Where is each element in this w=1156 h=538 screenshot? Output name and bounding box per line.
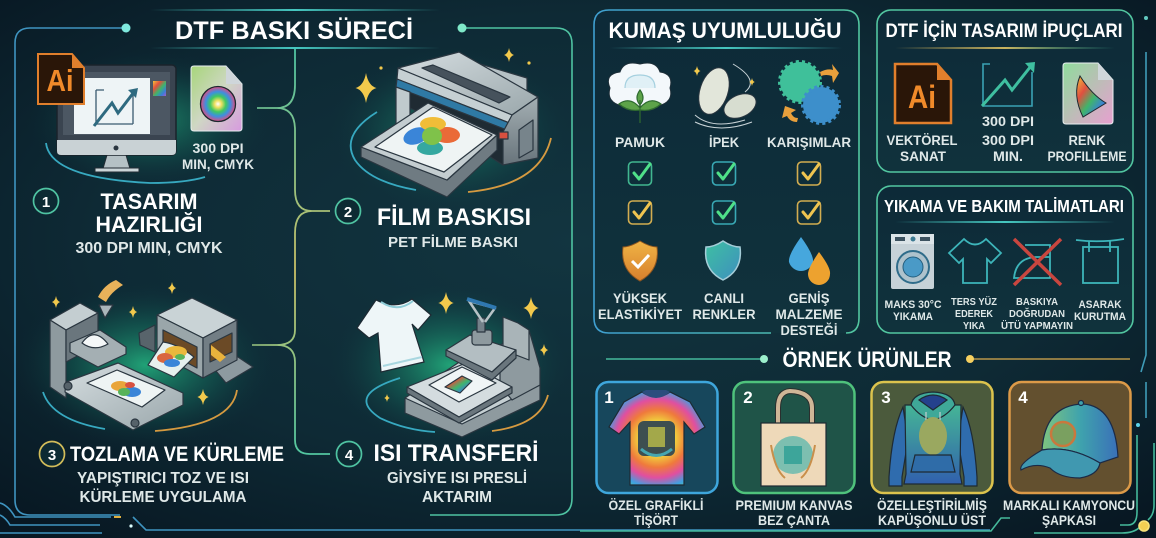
step 2 badge: 2 — [344, 204, 352, 221]
label: 300 dpi min: MIN. — [993, 149, 1023, 164]
label: wide material support: GENİŞ — [788, 291, 830, 306]
icon: colour gamut file — [1063, 63, 1113, 124]
label: high elasticity: YÜKSEK — [613, 291, 667, 306]
label: do not iron print: ÜTÜ YAPMAYIN — [1001, 319, 1073, 332]
icon: inside-out shirt — [949, 239, 1001, 283]
label: custom t-shirt: ÖZEL GRAFİKLİ — [608, 497, 704, 513]
label: canvas bag: PREMIUM KANVAS — [736, 497, 852, 513]
label: vivid colours: RENKLER — [692, 307, 756, 322]
number 1: 1 — [604, 388, 614, 407]
fabric rule — [610, 47, 842, 49]
label: wash inside out: YIKA — [963, 320, 985, 332]
icon: trucker cap — [1021, 400, 1118, 478]
icon: sparkles step 3 — [52, 282, 209, 405]
number 3: 3 — [881, 388, 891, 407]
circuit decoration: bottom right — [580, 16, 1154, 533]
label: canvas bag — [736, 497, 852, 528]
icon: resolution chart — [982, 62, 1035, 129]
label: high elasticity: ELASTİKİYET — [598, 307, 683, 322]
panel: wash and care — [877, 186, 1133, 333]
icon: hoodie — [889, 392, 977, 486]
icon: heat press — [366, 299, 548, 437]
heading: process: DTF BASKI SÜRECİ — [175, 16, 413, 45]
step 3 text: KÜRLEME UYGULAMA — [80, 489, 246, 506]
glow behind step 1 — [25, 50, 275, 190]
icon: vector file: Ai — [908, 79, 936, 115]
label: hang dry: KURUTMA — [1074, 311, 1126, 323]
label: trucker cap: MARKALI KAMYONCU — [1003, 497, 1135, 513]
heading: products: ÖRNEK ÜRÜNLER — [782, 347, 952, 372]
product card 1 — [596, 382, 718, 528]
step 1 badge — [34, 188, 58, 214]
icon: Adobe Illustrator file — [38, 54, 84, 104]
panel frame right side — [430, 28, 572, 515]
label: trucker cap — [1003, 497, 1135, 528]
icon: white t-shirt — [357, 299, 431, 372]
label: vector art — [886, 133, 958, 164]
icon: cotton — [608, 63, 671, 123]
label: silk: İPEK — [709, 135, 739, 150]
care rule — [895, 221, 1115, 223]
check grid — [628, 162, 820, 224]
step 4 text: AKTARIM — [422, 489, 492, 506]
icon: monitor with design — [46, 65, 205, 183]
care frame — [877, 186, 1133, 333]
label: colour profiling: PROFILLEME — [1048, 149, 1126, 164]
step 2 text — [377, 204, 531, 251]
step 3 badge: 3 — [48, 447, 56, 464]
heading: fabric: KUMAŞ UYUMLULUĞU — [608, 18, 842, 43]
icon: Adobe Illustrator file: Ai — [46, 63, 74, 98]
glow behind step 3 — [10, 280, 280, 450]
connector: brace flow — [252, 49, 330, 454]
label: 300 dpi min — [982, 133, 1034, 164]
label: file spec: MIN, CMYK — [182, 156, 254, 172]
label: canvas bag: BEZ ÇANTA — [758, 512, 830, 528]
label: wash inside out: EDEREK — [955, 308, 993, 320]
label: blends: KARIŞIMLAR — [767, 135, 851, 150]
number 4: 4 — [1018, 388, 1028, 407]
label: custom t-shirt: TİŞÖRT — [634, 512, 678, 528]
product card 3 — [872, 382, 992, 528]
panel: fabric compatibility — [594, 10, 859, 338]
product card 2 — [734, 382, 854, 528]
glow behind step 4 — [325, 280, 575, 450]
label: vivid colours — [692, 291, 756, 322]
label: trucker cap: ŞAPKASI — [1042, 512, 1096, 528]
step 4 text — [374, 440, 538, 506]
step 3 text: YAPIŞTIRICI TOZ VE ISI — [77, 470, 249, 487]
panel: DTF process — [10, 9, 575, 515]
step 1 text: TASARIM — [100, 189, 198, 214]
step 2 text: FİLM BASKISI — [377, 204, 531, 231]
step 2 text: PET FİLME BASKI — [388, 234, 518, 251]
label: wash inside out: TERS YÜZ — [951, 295, 998, 308]
label: hoodie: ÖZELLEŞTİRİLMİŞ — [877, 497, 987, 513]
step 3 text: TOZLAMA VE KÜRLEME — [70, 441, 284, 466]
step 3 badge — [40, 442, 64, 466]
section: sample products — [596, 347, 1135, 528]
step 3 text — [70, 441, 284, 506]
label: vector art: VEKTÖREL — [886, 133, 958, 148]
panel: DTF design tips — [877, 10, 1133, 172]
label: max 30 wash: YIKAMA — [893, 311, 933, 323]
icon: drops — [789, 237, 830, 285]
step 1 text — [76, 189, 223, 257]
label: wide material support: DESTEĞİ — [780, 323, 838, 338]
step 4 text: GİYSİYE ISI PRESLİ — [387, 470, 527, 487]
icon: colour profile file — [191, 66, 242, 131]
label: file spec — [182, 140, 254, 172]
label: vivid colours: CANLI — [704, 291, 744, 306]
title rules — [150, 9, 440, 49]
icon: vector file — [895, 64, 951, 123]
label: do not iron print — [1001, 296, 1073, 332]
panel frame — [15, 28, 124, 515]
heading: tips: DTF İÇİN TASARIM İPUÇLARI — [886, 21, 1122, 42]
label: colour profiling — [1048, 133, 1126, 164]
icon: film printer — [351, 52, 551, 197]
step 1 text: HAZIRLIĞI — [96, 212, 202, 237]
product card 4 — [1003, 382, 1135, 528]
label: hang dry — [1074, 299, 1126, 323]
title connector dots — [122, 24, 466, 32]
fabric frame — [594, 10, 859, 333]
number 2: 2 — [743, 388, 753, 407]
label: wash inside out — [951, 295, 998, 332]
label: colour profiling: RENK — [1068, 133, 1106, 148]
step 4 badge — [336, 442, 362, 466]
icon: powder and curing machine — [43, 280, 253, 431]
step 4 badge: 4 — [345, 447, 354, 464]
icon: silk cocoons — [693, 64, 760, 128]
label: do not iron print: BASKIYA — [1016, 296, 1058, 308]
glow behind step 2 — [325, 45, 575, 215]
icon: tie-dye t-shirt — [609, 390, 705, 485]
label: wide material support — [776, 291, 842, 338]
icon: blends — [780, 62, 839, 123]
label: custom t-shirt — [608, 497, 704, 528]
step 1 text: 300 DPI MIN, CMYK — [76, 240, 223, 257]
step 2 badge — [336, 198, 360, 224]
label: do not iron print: DOĞRUDAN — [1009, 307, 1065, 320]
label: high elasticity — [598, 291, 683, 322]
icon: sparkles step 4 — [384, 292, 548, 402]
tips rule — [895, 47, 1115, 49]
label: max 30 wash — [884, 299, 942, 323]
label: cotton: PAMUK — [615, 135, 665, 150]
products rule right — [966, 355, 1130, 363]
icon: sparkles step 2 — [356, 48, 531, 103]
label: hoodie: KAPÜŞONLU ÜST — [878, 512, 986, 528]
label: wide material support: MALZEME — [776, 307, 842, 322]
label: vector art: SANAT — [900, 149, 947, 164]
icon: washing machine — [891, 234, 934, 289]
step 4 text: ISI TRANSFERİ — [374, 440, 538, 467]
icon: orange shield — [623, 241, 657, 281]
icon: hang dry — [1076, 239, 1124, 283]
label: 300 dpi min: 300 DPI — [982, 133, 1034, 148]
label: hoodie — [877, 497, 987, 528]
label: file spec: 300 DPI — [192, 140, 244, 156]
icon: no direct iron — [1014, 239, 1061, 285]
step 1 badge: 1 — [42, 194, 50, 211]
heading: care: YIKAMA VE BAKIM TALİMATLARI — [884, 196, 1124, 216]
circuit decoration: bottom left — [0, 503, 990, 533]
icon: resolution chart: 300 DPI — [982, 114, 1034, 129]
tips frame — [877, 10, 1133, 172]
icon: teal shield — [706, 241, 740, 280]
icon: canvas tote — [761, 391, 826, 486]
products rule left — [606, 355, 768, 363]
label: hang dry: ASARAK — [1078, 299, 1122, 311]
label: max 30 wash: MAKS 30°C — [884, 299, 942, 311]
